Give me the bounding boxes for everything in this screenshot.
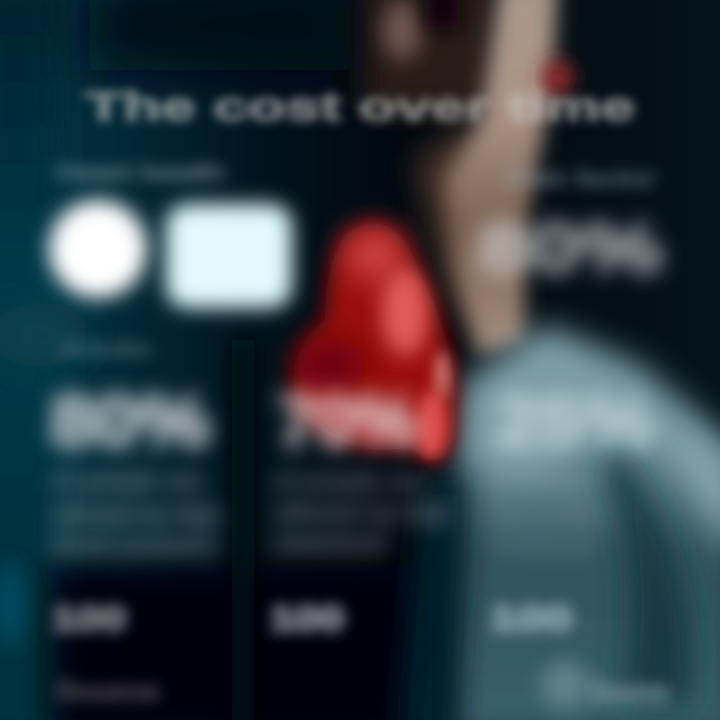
column 3 value: 100 — [490, 600, 572, 638]
column 2 description: of people are — [275, 468, 425, 493]
column 3 description: of disease — [495, 533, 595, 558]
column 2 value: 100 — [270, 600, 344, 638]
icon: pale cyan rounded panel — [166, 204, 292, 308]
small red accent by the wrist — [542, 60, 574, 96]
column 1 footnote: Source — [55, 676, 159, 706]
column 2: statistic — [270, 382, 457, 638]
column 3 description: are at risk — [495, 502, 601, 527]
column 3: statistic — [490, 382, 668, 709]
top right caption: Risk factor — [505, 166, 655, 191]
photo: person's denim shirt — [400, 325, 720, 720]
column 3 footnote: Source — [590, 676, 668, 709]
icon: white circle — [49, 200, 147, 298]
photo: person's head and shadowed hair — [365, 0, 495, 110]
column 3 percentage: 25% — [495, 382, 655, 462]
red anatomical heart — [293, 223, 455, 461]
column 2 percentage: 70% — [278, 382, 418, 462]
panel: top right statistic — [478, 166, 663, 287]
column 1 description: affected by high — [52, 502, 220, 527]
top right percentage: 80% — [478, 209, 663, 287]
column 1 description: of people are — [52, 468, 202, 493]
column 1 value: 100 — [52, 600, 126, 638]
photo: person's raised arm — [415, 0, 558, 355]
column 1 small label: Adults — [60, 339, 150, 361]
panel: top left statistic — [49, 160, 292, 308]
column 1: statistic — [50, 339, 227, 706]
column 2 description: affected by high — [275, 500, 450, 525]
column 3 description: of people — [495, 468, 600, 493]
column 1 percentage: 80% — [50, 382, 210, 462]
title: The cost over time — [85, 85, 635, 129]
top left caption: Heart health — [55, 160, 225, 185]
column 1 description: blood pressure — [52, 533, 217, 558]
column 2 description: cholesterol — [275, 531, 385, 556]
